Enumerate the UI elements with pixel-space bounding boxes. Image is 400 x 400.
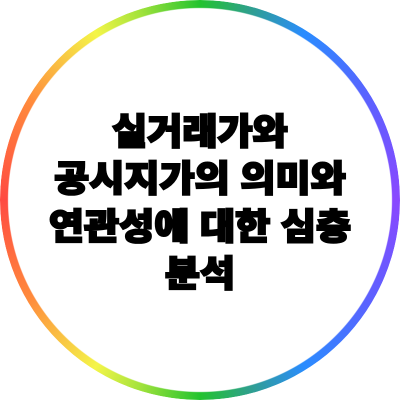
title: 분석 [165, 254, 235, 294]
title: 실거래가와 [112, 112, 288, 152]
title: 연관성에 대한 심층 [49, 206, 351, 247]
title [49, 112, 351, 294]
title: 공시지가의 의미와 [54, 159, 346, 199]
